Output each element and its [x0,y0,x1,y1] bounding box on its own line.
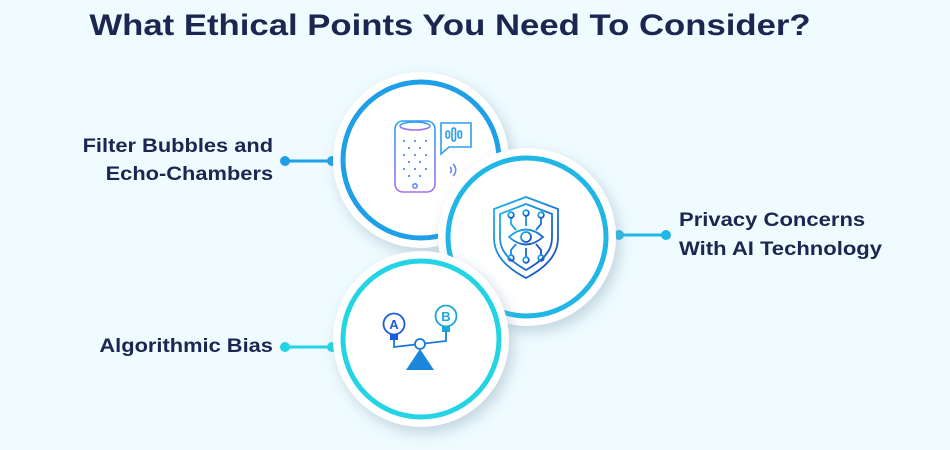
circle: algorithmic bias [333,251,509,427]
label: privacy: Privacy Concerns [679,209,865,231]
label: privacy: With AI Technology [679,238,882,260]
icon: balance with bulbs: A [389,317,399,332]
connector: filter bubbles [280,156,337,166]
icon: shield with eye [494,197,558,278]
label: filter bubbles: Filter Bubbles and [82,135,273,157]
circle: smart speaker [333,72,509,248]
icon: balance with bulbs [384,306,456,370]
connector: privacy [614,230,671,240]
label: filter bubbles [82,135,273,185]
icon: smart speaker [395,121,471,192]
icon: balance with bulbs: B [441,309,451,324]
connector: bias [280,342,337,352]
label: algorithmic bias: Algorithmic Bias [99,335,273,357]
label: privacy [679,209,882,260]
title: What Ethical Points You Need To Consider? [89,9,811,42]
label: filter bubbles: Echo-Chambers [106,163,273,185]
circle: privacy shield [438,148,616,326]
